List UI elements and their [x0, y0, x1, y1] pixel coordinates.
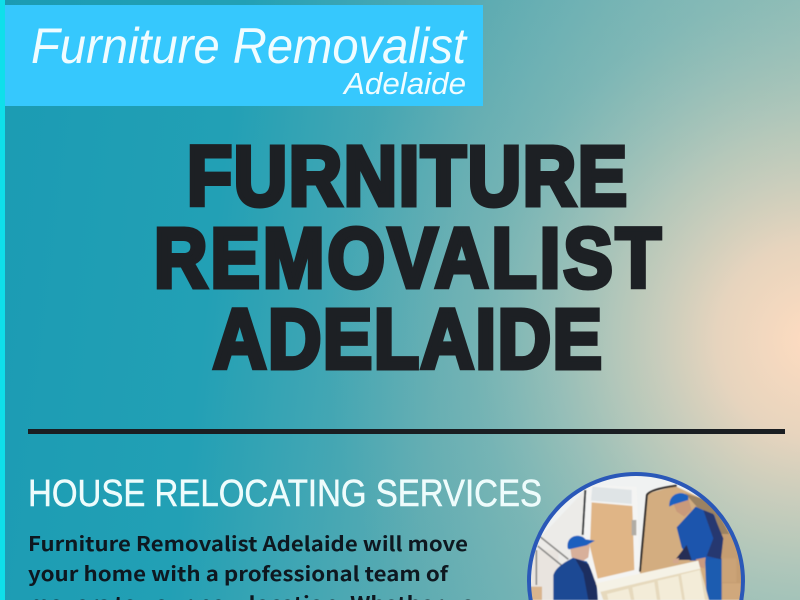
logo banner	[5, 5, 483, 106]
section heading: HOUSE RELOCATING SERVICES	[28, 473, 542, 515]
van door	[583, 485, 640, 585]
left accent strip	[0, 0, 5, 600]
photo ring	[529, 474, 743, 600]
main title: ADELAIDE	[213, 292, 602, 386]
body text: Furniture Removalist Adelaide will move	[28, 528, 468, 557]
main title	[154, 129, 661, 386]
main title: REMOVALIST	[154, 211, 661, 305]
logo banner: Furniture Removalist	[31, 18, 468, 74]
divider	[28, 429, 785, 434]
body text	[28, 535, 470, 600]
mover left	[553, 536, 598, 600]
main title: FURNITURE	[187, 129, 627, 223]
photo: movers loading a van	[525, 470, 750, 600]
logo banner: Adelaide	[342, 66, 466, 101]
body text: your home with a professional team of	[28, 558, 450, 587]
boxes	[721, 534, 741, 584]
wall and stairs	[525, 490, 585, 600]
mover right	[669, 493, 723, 600]
shelf unit	[596, 561, 709, 600]
van interior	[638, 484, 730, 590]
